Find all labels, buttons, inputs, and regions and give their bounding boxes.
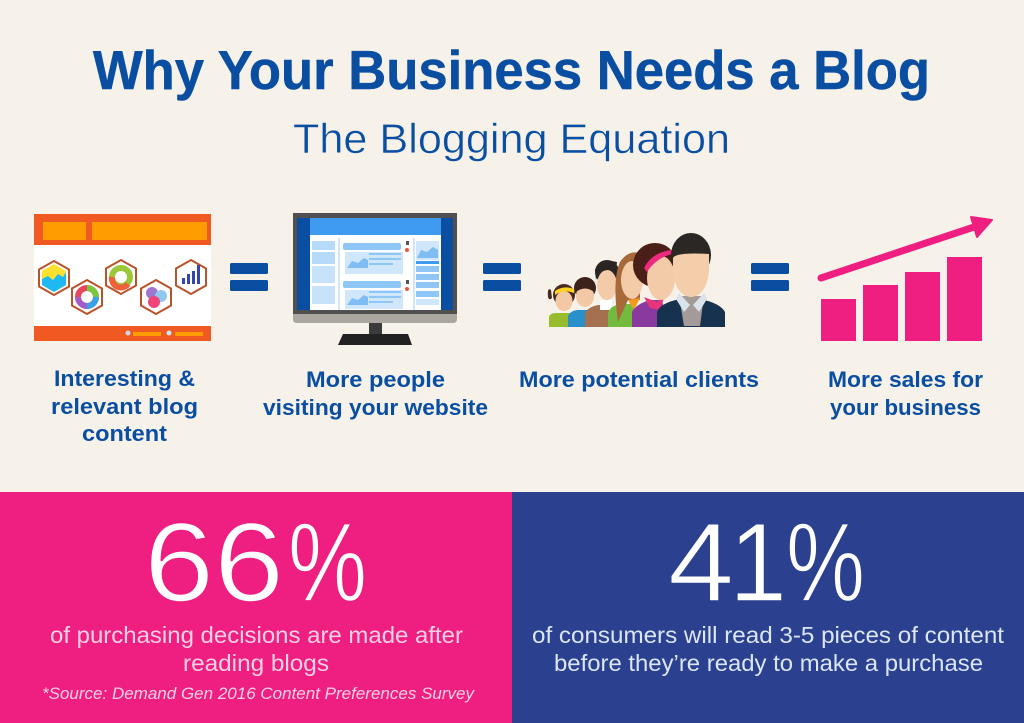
label: more people: More people [306, 367, 445, 392]
description 41%: of consumers will read 3-5 pieces of content [532, 622, 1005, 648]
label: blog content: Interesting & [54, 366, 195, 391]
label: more people [263, 367, 488, 420]
description 66% [50, 622, 463, 676]
teen girl [608, 252, 643, 327]
big number 41%: 1 [729, 500, 787, 625]
equals sign 3 [751, 263, 789, 291]
label: more clients: More potential clients [519, 367, 759, 392]
equals sign 1 [230, 263, 268, 291]
title: Why Your Business Needs a Blog [93, 39, 930, 101]
description 66%: reading blogs [183, 650, 329, 676]
label: blog content: relevant blog [51, 394, 198, 419]
description 41%: before they’re ready to make a purchase [554, 650, 983, 676]
man [657, 233, 725, 327]
equals sign 2 [483, 263, 521, 291]
label: more sales [828, 367, 983, 420]
big number 41%: 4 [668, 500, 734, 625]
icon: blog content page [34, 214, 211, 341]
subtitle: The Blogging Equation [293, 115, 730, 162]
source note: *Source: Demand Gen 2016 Content Preferences Survey [42, 684, 475, 703]
label: more people: visiting your website [263, 395, 488, 420]
icon: group of people [548, 233, 725, 327]
description 41% [532, 622, 1005, 676]
woman [632, 243, 677, 327]
icon: desktop monitor with website [293, 213, 457, 345]
label: more sales: your business [830, 395, 981, 420]
teen boy [585, 260, 619, 327]
boy [568, 277, 596, 327]
label: more sales: More sales for [828, 367, 983, 392]
big number 66%: % [288, 500, 367, 625]
label: blog content: content [82, 421, 168, 446]
big number 66% [144, 500, 367, 625]
icon: growth bar chart with arrow [821, 217, 992, 341]
girl [548, 284, 575, 327]
panel: 41 percent statistic [512, 492, 1024, 723]
description 66%: of purchasing decisions are made after [50, 622, 463, 648]
big number 41% [668, 500, 865, 625]
label: blog content [51, 366, 198, 446]
big number 66%: 66 [144, 500, 284, 625]
panel: 66 percent statistic [0, 492, 512, 723]
big number 41%: % [786, 500, 865, 625]
